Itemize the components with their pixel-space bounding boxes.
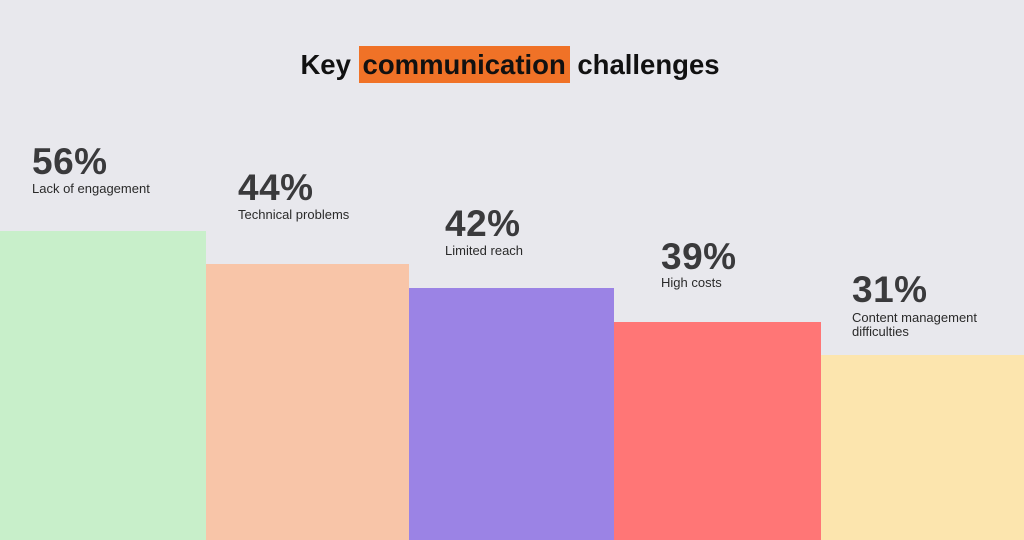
bar: technical problems: [206, 264, 409, 540]
value: 31%: 31%: [852, 269, 928, 310]
label: content management difficulties: [852, 310, 977, 339]
bar: content management: [821, 355, 1024, 540]
label: technical problems: Technical problems: [238, 207, 349, 222]
label: lack of engagement: Lack of engagement: [32, 181, 150, 196]
bar: high costs: [614, 322, 821, 540]
bar: lack of engagement: [0, 231, 206, 540]
label: content management difficulties: difficulties: [852, 324, 909, 339]
label: limited reach: Limited reach: [445, 243, 523, 258]
label: content management difficulties: Content management: [852, 310, 977, 325]
value: 44%: 44%: [238, 167, 314, 208]
label: high costs: High costs: [661, 275, 722, 290]
value: 42%: 42%: [445, 203, 521, 244]
value: 56%: 56%: [32, 141, 108, 182]
title: Key communication challenges: [300, 49, 720, 80]
value: 39%: 39%: [661, 236, 737, 277]
bar: limited reach: [409, 288, 614, 540]
